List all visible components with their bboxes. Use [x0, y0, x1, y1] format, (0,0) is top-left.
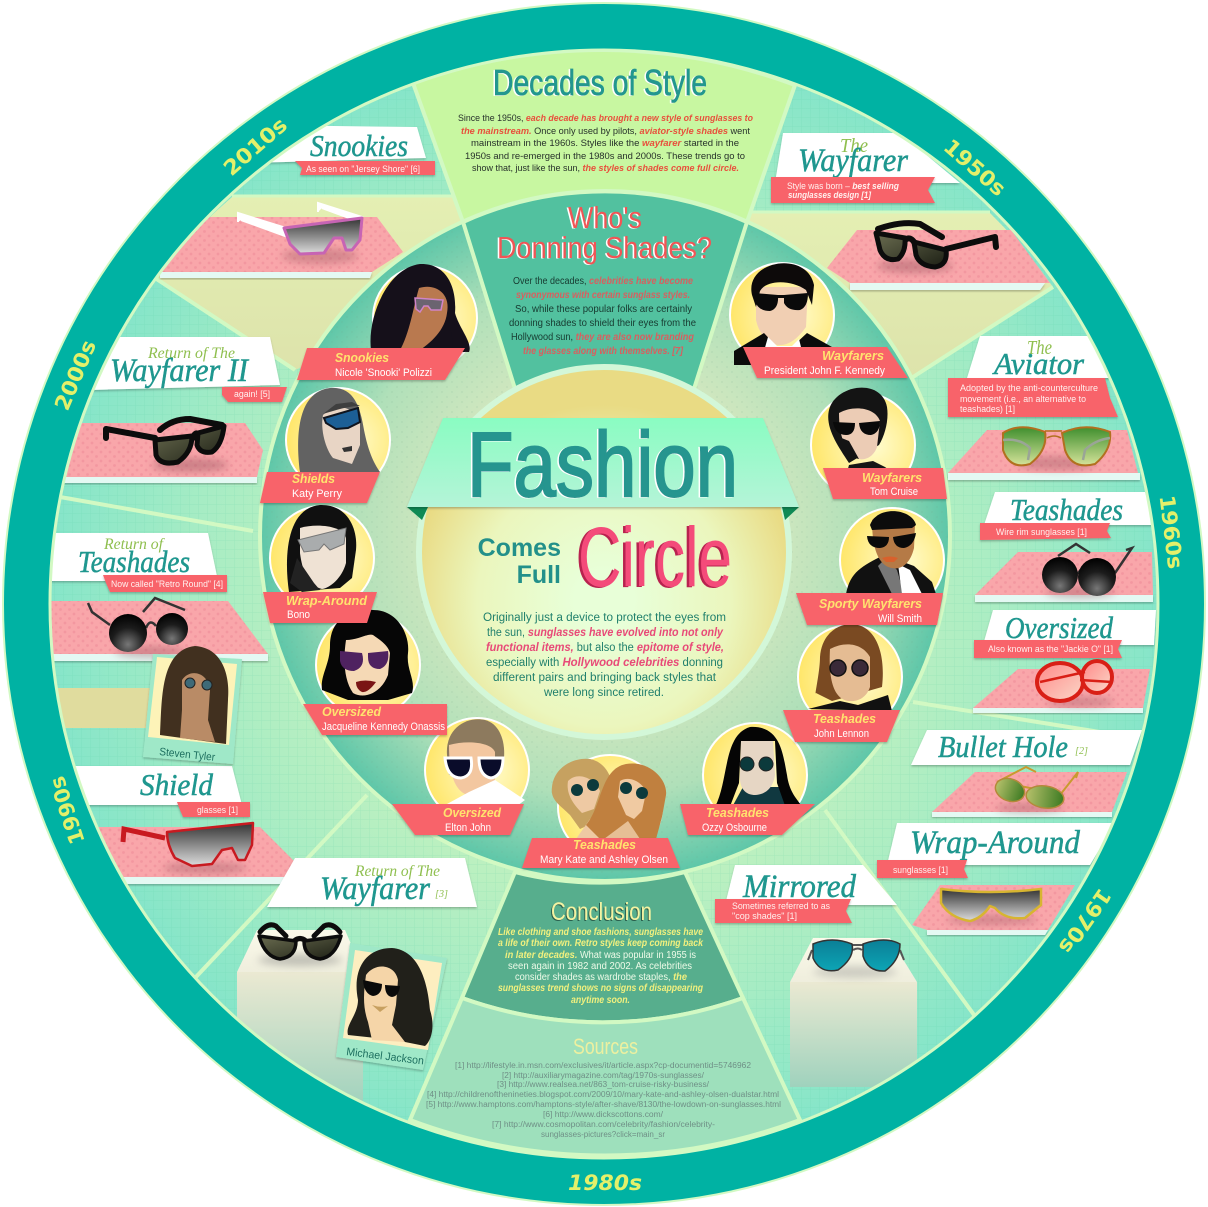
banner: Oversized: Oversized	[1005, 610, 1113, 645]
tag: Wire rim sunglasses: Wire rim sunglasses [1]	[996, 527, 1087, 537]
name tag: Wayfarers, President John F. Kennedy	[743, 347, 908, 378]
section divider lines	[60, 196, 1137, 1030]
name tag: Teashades, Ozzy Osbourne: Teashades	[706, 806, 769, 820]
label: Steven Tyler: Steven Tyler	[159, 746, 216, 764]
text block: source urls: sunglasses-pictures?click=main_sr	[541, 1130, 665, 1139]
sunglasses: Return of Teashades	[88, 598, 188, 658]
name tag: Oversized, Elton John: Elton John	[445, 822, 491, 834]
heading: Conclusion: Conclusion	[551, 898, 652, 926]
name tag: Wayfarers, Tom Cruise: Wayfarers	[862, 471, 922, 485]
tag: Adopted by the anti-counterculture movement: Adopted by the anti-counterculture	[960, 383, 1098, 393]
name tag: Teashades, John Lennon	[783, 710, 900, 742]
banner: Snookies	[250, 125, 435, 175]
heading: Who's Donning Shades?	[497, 200, 712, 265]
banner: The Wayfarer: The	[840, 135, 868, 157]
shelf: 1960s Teashades	[975, 552, 1153, 602]
sunglasses: Shield red	[123, 823, 253, 874]
banner: Mirrored	[715, 865, 897, 923]
text block: conclusion: a life of their own. Retro styles keep coming back	[498, 938, 704, 949]
name tag: Teashades, Mary Kate and Ashley Olsen	[522, 838, 680, 868]
name tag: Sporty Wayfarers, Will Smith: Will Smith	[878, 613, 922, 625]
tag: Adopted by the anti-counterculture movement: teashades) [1]	[960, 404, 1015, 414]
portrait: John Lennon	[798, 624, 902, 729]
heading: Who's Donning Shades?: Who's	[568, 200, 642, 235]
banner: Return of The Wayfarer II: Return of The	[147, 345, 235, 362]
banner: The Wayfarer: Wayfarer	[798, 143, 908, 179]
tag: sunglasses: sunglasses [1]	[893, 865, 948, 875]
text block: who's donning: donning shades to shield their eyes from the	[509, 318, 696, 329]
shelf: 1990s Return of Teashades	[48, 601, 268, 661]
banner: Shield: Shield	[140, 767, 213, 802]
shelf: 1960s Aviator	[948, 430, 1140, 480]
name tag: Wayfarers, President John F. Kennedy: President John F. Kennedy	[764, 365, 885, 377]
sunglasses: Teashades 1960s	[1042, 544, 1132, 598]
portrait: Katy Perry	[286, 388, 390, 492]
name tag: Wrap-Around, Bono: Bono	[287, 609, 310, 621]
tag: Jackie O	[974, 640, 1122, 658]
sunglasses: Aviator	[1003, 427, 1110, 470]
name tag: Wrap-Around, Bono: Wrap-Around	[286, 594, 367, 608]
text block: decades intro	[458, 113, 753, 174]
tag: Style was born: Style was born – best selling	[787, 181, 899, 191]
label: Michael Jackson: Michael Jackson	[346, 1046, 425, 1067]
text block: conclusion: sunglasses trend shows no signs of disappearing	[498, 983, 703, 994]
tag: Style was born: sunglasses design [1]	[788, 190, 872, 200]
name tag: Oversized, Elton John	[392, 804, 524, 835]
name tag: Wayfarers, Tom Cruise: Tom Cruise	[870, 486, 918, 498]
decade label: 2000s: 2000s	[50, 337, 101, 414]
portrait: Ozzy Osbourne	[703, 723, 807, 827]
text block: source urls: [5] http://www.hamptons.com/hamptons-style/after-shave/8130/the-lowdown-on-sunglasses.html	[426, 1100, 781, 1109]
name tag: Teashades, Mary Kate and Ashley Olsen: Mary Kate and Ashley Olsen	[540, 854, 668, 866]
heading: Sources: Sources	[573, 1034, 638, 1059]
text block: source urls: [6] http://www.dickscottons.com/	[543, 1110, 664, 1119]
sunglasses: Mirrored	[808, 940, 904, 978]
banner: Return of Teashades: Teashades	[78, 544, 190, 579]
panel: Who's Donning Shades ring	[260, 191, 950, 881]
heading: Who's Donning Shades?: Donning Shades?	[497, 230, 712, 265]
banner: Teashades (1960s)	[980, 492, 1155, 540]
name tag: Shields, Katy Perry: Katy Perry	[292, 488, 342, 500]
portrait: Will Smith	[840, 508, 944, 612]
sunglasses: Wayfarer 1950s	[876, 223, 996, 273]
heading: Decades of Style: Decades of Style	[493, 62, 707, 103]
decade label: 1980s: 1980s	[568, 1171, 642, 1195]
tag: Wire rim sunglasses	[980, 523, 1111, 540]
text block: who's donning	[509, 276, 696, 357]
text block: source urls: [3] http://www.realsea.net/863_tom-cruise-risky-business/	[497, 1080, 710, 1089]
decade label: 2010s: 2010s	[219, 113, 292, 181]
text block: source urls: [4] http://childrenofthenineties.blogspot.com/2009/10/mary-kate-and-ashley-olsen-dualstar.html	[427, 1090, 779, 1099]
title: Fashion: Fashion	[467, 414, 738, 516]
name tag: Wayfarers, Tom Cruise	[823, 468, 947, 499]
tag: Adopted by the anti-counterculture movement: movement (i.e., an alternative to	[960, 394, 1086, 404]
tag: cop shades	[715, 899, 852, 923]
banner: The Aviator: Aviator	[992, 346, 1085, 381]
banner: Return of The Wayfarer	[267, 858, 477, 907]
name tag: Teashades, Ozzy Osbourne: Ozzy Osbourne	[702, 822, 767, 834]
pedestal: 1970s	[790, 938, 917, 1087]
banner: Wrap-Around	[877, 823, 1115, 878]
tag: As seen on Jersey Shore	[295, 161, 435, 175]
name tag: Snookies, Nicole Polizzi: Nicole 'Snooki' Polizzi	[335, 367, 432, 379]
banner: Return of The Wayfarer: [3]	[435, 888, 448, 900]
name tag: Oversized, Jacqueline Kennedy Onassis: Oversized	[322, 705, 381, 719]
text block: decades intro: mainstream in the 1960s. Styles like the wayfarer started in the	[471, 138, 739, 149]
text block: center intro	[483, 612, 726, 699]
text block: source urls: [2] http://auxiliarymagazine.com/tag/1970s-sunglasses/	[502, 1071, 705, 1080]
text block: conclusion: consider shades as wardrobe staples, the	[515, 972, 688, 983]
banner: Return of The Wayfarer: Wayfarer	[320, 871, 430, 907]
portrait: Mary Kate and Ashley Olsen	[552, 755, 666, 859]
tag: Retro Round	[103, 575, 227, 592]
portrait: Jacqueline Onassis	[316, 610, 420, 717]
banner: Return of Teashades: Return of	[103, 536, 166, 553]
banner: Return of The Wayfarer II	[90, 337, 287, 402]
text block: center intro: the sun, sunglasses have evolved into not only	[487, 627, 724, 639]
name tag: Snookies, Nicole Polizzi	[297, 348, 465, 380]
text block: who's donning: synonymous with certain sunglass styles.	[516, 290, 690, 301]
tag: again	[222, 387, 287, 402]
name tag: Shields, Katy Perry	[260, 472, 380, 503]
tag: sunglasses	[877, 860, 968, 878]
panel: 1990s khaki wall	[50, 688, 152, 728]
name tag: Snookies, Nicole Polizzi: Snookies	[335, 351, 389, 365]
name tag: Oversized, Jacqueline Kennedy Onassis	[303, 704, 447, 735]
shelf: 2010s Snookies	[160, 217, 403, 278]
text block: who's donning: the glasses along with themselves. [7]	[523, 346, 684, 357]
shelf: 1950s Wayfarer	[827, 230, 1050, 290]
name tag: Wayfarers, President John F. Kennedy: Wayfarers	[822, 349, 884, 363]
text block: decades intro: Since the 1950s, each decade has brought a new style of sunglasses to	[458, 113, 753, 124]
name tag: Sporty Wayfarers, Will Smith	[796, 593, 943, 625]
banner: The Aviator	[948, 336, 1118, 417]
tag: Retro Round: Now called "Retro Round" [4]	[111, 579, 223, 589]
portrait: Snooki	[370, 264, 477, 370]
panel: 2010s khaki wall	[155, 197, 463, 370]
name tag: Wrap-Around, Bono	[263, 592, 377, 623]
text block: decades intro: the mainstream. Once only used by pilots, aviator-style shades went	[461, 126, 750, 137]
banner: Mirrored: Mirrored	[742, 869, 856, 905]
tag: glasses: glasses [1]	[197, 805, 238, 815]
tag: As seen on Jersey Shore: As seen on "Jersey Shore" [6]	[306, 164, 420, 174]
decade label: 1960s: 1960s	[1155, 494, 1187, 570]
text block: center intro: especially with Hollywood celebrities donning	[486, 657, 723, 669]
sunglasses: Wayfarer II 2000s	[106, 419, 228, 472]
portrait: Tom Cruise	[811, 388, 915, 497]
polaroid: Michael Jackson	[336, 943, 447, 1070]
tag: glasses	[177, 802, 250, 817]
panel: center sun circle	[419, 367, 789, 737]
banner: Shield	[60, 766, 250, 817]
text block: center intro: functional items, but also the epitome of style,	[486, 642, 724, 654]
text block: conclusion: anytime soon.	[571, 995, 630, 1006]
shelf: 1970s Bullet Hole	[932, 772, 1127, 817]
sunglasses: Return of Wayfarer	[258, 925, 342, 966]
panel: 1950s khaki wall	[747, 213, 1053, 377]
sunglasses: Oversized red	[1037, 661, 1114, 707]
text block: conclusion: in later decades. What was popular in 1955 is	[505, 950, 696, 961]
sunglasses: Snookies shields	[238, 203, 362, 264]
banner: Teashades (1960s): Teashades	[1010, 492, 1123, 527]
text block: center intro: different pairs and bringing back styles that	[493, 672, 717, 684]
text block: conclusion	[498, 927, 704, 1006]
text block: who's donning: So, while these popular folks are certainly	[515, 304, 692, 315]
shelf: 1990s Shield	[98, 827, 298, 884]
shelf: 1960s Oversized	[973, 669, 1150, 713]
banner: Return of The Wayfarer: Return of The	[354, 863, 440, 880]
text block: center intro: were long since retired.	[543, 687, 664, 699]
banner: Return of Teashades	[40, 533, 227, 592]
tag: Jackie O: Also known as the "Jackie O" [1]	[988, 644, 1113, 654]
banner: The Wayfarer	[771, 133, 960, 203]
name tag: Sporty Wayfarers, Will Smith: Sporty Wayfarers	[819, 597, 922, 611]
tag: Style was born	[771, 177, 935, 203]
sunglasses: Bullet Hole	[992, 767, 1078, 813]
decade label: 1990s: 1990s	[45, 773, 90, 847]
decade label: 1950s: 1950s	[939, 134, 1010, 201]
text block: decades intro: show that, just like the sun, the styles of shades come full circle.	[472, 163, 739, 174]
pedestal: 1980s	[237, 930, 363, 1107]
banner: The Aviator: The	[1027, 337, 1052, 359]
text block: source urls: [1] http://lifestyle.in.msn.com/exclusives/it/article.aspx?cp-documentid=5746962	[455, 1061, 752, 1070]
name tag: Shields, Katy Perry: Shields	[292, 472, 335, 486]
text block: who's donning: Hollywood sun, they are also now branding	[511, 332, 694, 343]
banner: Return of The Wayfarer II: Wayfarer II	[110, 353, 250, 389]
title: Comes Full	[478, 534, 561, 589]
portrait: JFK	[730, 263, 834, 367]
sunglasses: Wrap-Around	[941, 889, 1041, 925]
title: Comes Full: Comes	[478, 534, 561, 562]
tag: cop shades: "cop shades" [1]	[732, 911, 797, 921]
banner: Snookies: Snookies	[310, 128, 408, 163]
banner: Bullet Hole	[911, 729, 1142, 765]
name tag: Oversized, Jacqueline Kennedy Onassis: Jacqueline Kennedy Onassis	[322, 721, 445, 733]
panel: Sources wedge	[410, 998, 800, 1156]
title: Circle: Circle	[578, 510, 732, 604]
text block: conclusion: Like clothing and shoe fashions, sunglasses have	[498, 927, 704, 938]
banner: Bullet Hole: Bullet Hole	[938, 729, 1068, 764]
polaroid: Steven Tyler	[143, 646, 242, 764]
banner: Oversized	[974, 610, 1156, 658]
text block: decades intro: 1950s and re-emerged in the 1980s and 2000s. These trends go to	[465, 151, 745, 162]
banner: Bullet Hole: [2]	[1075, 745, 1088, 757]
tag: cop shades: Sometimes referred to as	[732, 901, 830, 911]
banner: Wrap-Around: Wrap-Around	[910, 825, 1080, 861]
text block: who's donning: Over the decades, celebrities have become	[513, 276, 694, 287]
portrait: Elton John	[425, 718, 529, 822]
panel: Decades of Style wedge	[413, 50, 795, 222]
tag: again: again! [5]	[234, 389, 270, 399]
shelf: 2000s Wayfarer II	[63, 423, 263, 483]
portrait: Bono	[270, 505, 374, 610]
text block: source urls: [7] http://www.cosmopolitan.com/celebrity/fashion/celebrity-	[492, 1120, 715, 1129]
title: Comes Full: Full	[517, 561, 561, 589]
tag: Adopted by the anti-counterculture movement	[948, 378, 1118, 417]
decade label: 1970s: 1970s	[1054, 884, 1116, 958]
text block: source urls	[426, 1061, 781, 1139]
name tag: Teashades, John Lennon: Teashades	[813, 712, 876, 726]
name tag: Teashades, John Lennon: John Lennon	[814, 728, 869, 740]
name tag: Teashades, Ozzy Osbourne	[680, 804, 815, 835]
name tag: Teashades, Mary Kate and Ashley Olsen: Teashades	[573, 838, 636, 852]
name tag: Oversized, Elton John: Oversized	[443, 806, 501, 820]
text block: conclusion: seen again in 1982 and 2002. As celebrities	[508, 961, 692, 972]
shelf: 1970s Wrap-Around	[912, 885, 1075, 935]
text block: center intro: Originally just a device to protect the eyes from	[483, 612, 726, 624]
panel: Conclusion wedge	[462, 872, 743, 1022]
banner: Fashion title ribbon	[407, 414, 799, 520]
